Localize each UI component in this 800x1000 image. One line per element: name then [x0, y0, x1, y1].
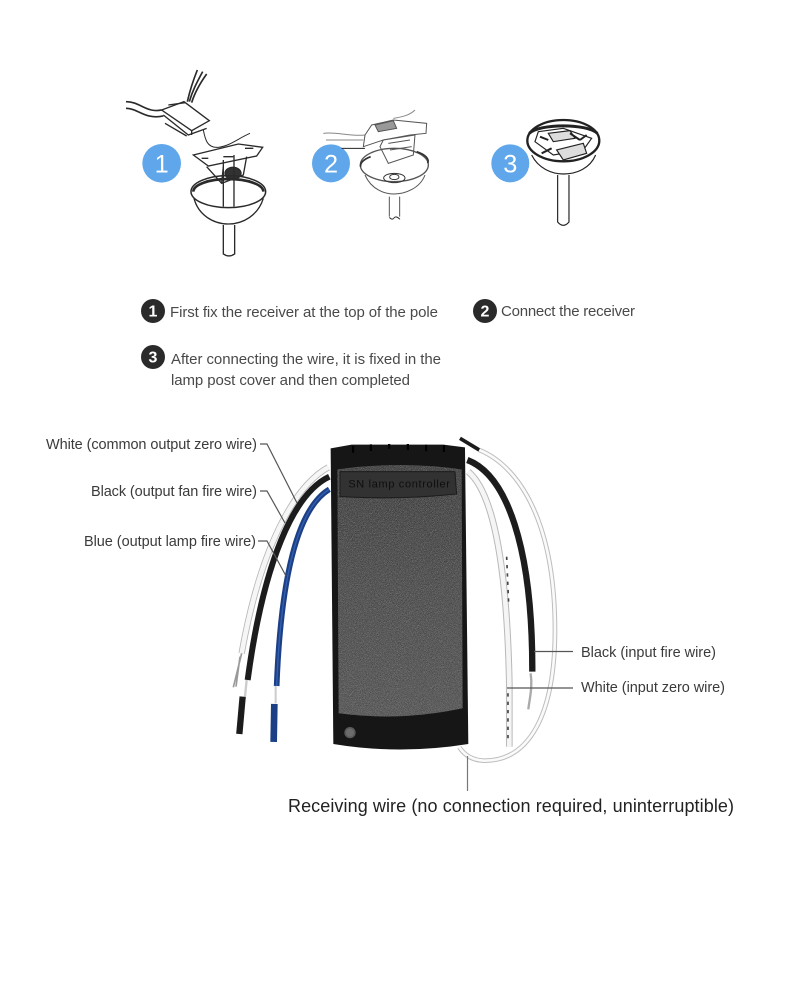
label: white input: White (input zero wire) [581, 680, 725, 696]
step 1 text [141, 299, 438, 323]
illustration: step 1 receiver above pole cover [126, 70, 266, 256]
label plate [340, 472, 457, 498]
vent notches [352, 444, 445, 453]
illustration: step 3 completed pole cover [491, 120, 599, 225]
step 2 text: Connect the receiver [501, 303, 635, 320]
icon: badge 2: 2 [324, 150, 338, 178]
icon: badge 1 [142, 144, 181, 183]
step 2 text [473, 299, 635, 323]
label: white common output [46, 437, 297, 503]
label: black output fan [91, 484, 285, 523]
label: black input: Black (input fire wire) [581, 645, 716, 661]
label: white common output: White (common output zero wire) [46, 437, 257, 453]
step 2 text: 2 [481, 304, 490, 320]
icon: badge 1: 1 [155, 150, 169, 178]
receiver device [331, 444, 468, 749]
step 1 text: First fix the receiver at the top of the pole [170, 304, 438, 321]
wire: black input [467, 460, 532, 709]
step 1 text: 1 [149, 304, 158, 320]
wires: right inputs [459, 438, 555, 761]
output wire labels [46, 437, 725, 696]
wire: black output fan [239, 477, 329, 734]
label: black output fan: Black (output fan fire wire) [91, 484, 257, 500]
wire: blue output lamp [274, 489, 329, 742]
illustration: step 2 connect receiver [312, 110, 428, 219]
step 3 text [141, 345, 441, 389]
step list [141, 299, 635, 389]
indicator light [344, 727, 356, 738]
icon: badge 3: 3 [503, 150, 517, 178]
label: receiving wire: Receiving wire (no connection required, uninterruptible) [288, 796, 734, 816]
wires: left outputs [233, 467, 329, 742]
label plate: SN lamp controller [348, 478, 450, 490]
step 3 text: After connecting the wire, it is fixed in the [171, 351, 441, 368]
label: blue output lamp [84, 534, 286, 576]
wire: white common output [233, 467, 328, 687]
wire: receiving antenna [459, 438, 555, 761]
step 3 text: 3 [149, 350, 158, 366]
wire: white input [468, 472, 509, 747]
step 3 text: lamp post cover and then completed [171, 372, 410, 389]
label: blue output lamp: Blue (output lamp fire wire) [84, 534, 256, 550]
